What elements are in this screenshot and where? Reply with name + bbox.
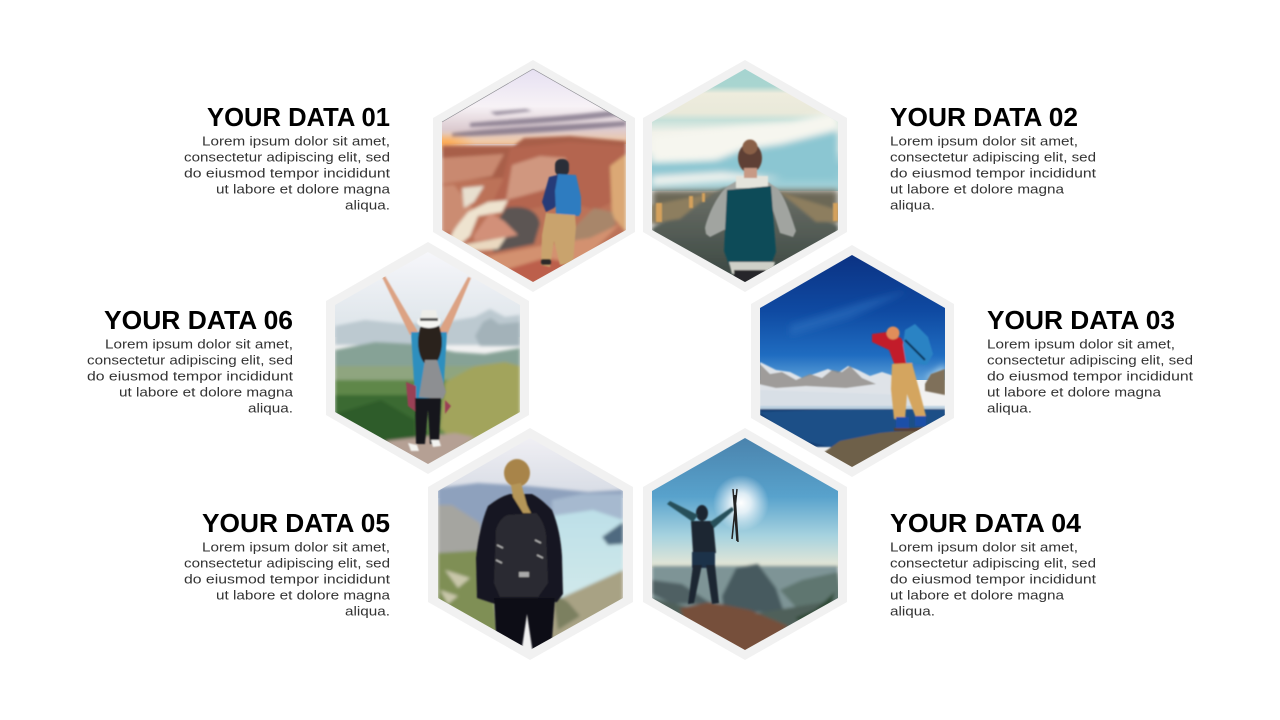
hexagon: photo 04 hiker raising poles (643, 428, 847, 660)
body: your data 02: do eiusmod tempor incididunt (890, 166, 1096, 180)
frame: hexagon 05 (428, 428, 633, 660)
body: your data 01: do eiusmod tempor incididunt (184, 166, 390, 180)
photo: woman in hat above forest (335, 252, 520, 470)
body: your data 05 (184, 540, 391, 618)
photo: hiker on a road (652, 69, 838, 286)
body: your data 05: aliqua. (345, 604, 390, 618)
heading: your data 02: YOUR DATA 02 (890, 104, 1078, 132)
body: your data 06: ut labore et dolore magna (119, 384, 294, 400)
body: your data 03: Lorem ipsum dolor sit amet, (987, 336, 1175, 352)
body: your data 01: aliqua. (345, 198, 390, 212)
hexagon: photo 05 hiker over fjord (428, 428, 633, 660)
hexagon: photo 02 road hiker (643, 60, 847, 292)
icon: road posts (656, 193, 838, 222)
person: hiker in red jacket (872, 324, 933, 431)
body: your data 02: aliqua. (890, 198, 935, 212)
text block: your data 03 (987, 307, 1193, 416)
photo: hiker looking over fjord (438, 438, 623, 654)
body: your data 06: aliqua. (248, 400, 293, 416)
body: your data 01: ut labore et dolore magna (216, 182, 391, 196)
hexagon: photo 06 hiker with raised arms (326, 242, 529, 474)
heading: your data 06: YOUR DATA 06 (104, 307, 293, 335)
text block: your data 06 (87, 307, 294, 416)
person: hiker in black jacket (476, 459, 563, 654)
person: woman with raised arms (382, 276, 471, 451)
icon: sun glow (714, 476, 768, 529)
body: your data 01 (184, 134, 391, 212)
hexagon: photo 01 canyon hiker (416, 60, 635, 292)
person: silhouette with raised arms (667, 501, 734, 604)
heading: your data 03: YOUR DATA 03 (987, 307, 1175, 335)
text block: your data 02 (890, 104, 1096, 212)
body: your data 02: consectetur adipiscing elit, sed (890, 150, 1096, 164)
body: your data 06: Lorem ipsum dolor sit amet, (105, 336, 293, 352)
text block: your data 04 (890, 510, 1096, 618)
body: your data 02 (890, 134, 1096, 212)
body: your data 01: Lorem ipsum dolor sit amet, (202, 134, 390, 148)
body: your data 04: do eiusmod tempor incididunt (890, 572, 1096, 586)
heading: your data 04: YOUR DATA 04 (890, 510, 1082, 538)
body: your data 01: consectetur adipiscing elit, sed (184, 150, 390, 164)
body: your data 03: aliqua. (987, 400, 1032, 416)
body: your data 03: consectetur adipiscing elit, sed (987, 352, 1193, 368)
text block: your data 01 (184, 104, 391, 212)
hexagon: photo 03 photographer at lake (750, 245, 954, 477)
heading: your data 01: YOUR DATA 01 (207, 104, 390, 132)
body: your data 04: consectetur adipiscing elit, sed (890, 556, 1096, 570)
frame: hexagon 02 (643, 60, 847, 292)
body: your data 02: ut labore et dolore magna (890, 182, 1065, 196)
body: your data 04: aliqua. (890, 604, 935, 618)
text block: your data 05 (184, 510, 391, 618)
body: your data 02: Lorem ipsum dolor sit amet, (890, 134, 1078, 148)
person: hiker with blue backpack (541, 159, 581, 267)
photo: hiker overlooking canyon (442, 70, 626, 282)
body: your data 04: Lorem ipsum dolor sit amet, (890, 540, 1078, 554)
person: hiker with teal backpack (705, 140, 796, 284)
body: your data 03 (987, 336, 1193, 416)
body: your data 06: do eiusmod tempor incididunt (87, 368, 293, 384)
heading: your data 05: YOUR DATA 05 (202, 510, 390, 538)
photo: hiker photographing mountain lake (750, 255, 945, 472)
frame: hexagon 01 (433, 60, 635, 292)
body: your data 04: ut labore et dolore magna (890, 588, 1065, 602)
body: your data 03: do eiusmod tempor incididunt (987, 368, 1193, 384)
body: your data 06 (87, 336, 294, 416)
body: your data 03: ut labore et dolore magna (987, 384, 1162, 400)
body: your data 05: ut labore et dolore magna (216, 588, 391, 602)
body: your data 04 (890, 540, 1096, 618)
frame: hexagon 03 (751, 245, 954, 477)
body: your data 05: consectetur adipiscing elit, sed (184, 556, 390, 570)
body: your data 06: consectetur adipiscing elit, sed (87, 352, 293, 368)
artifact: thin dark edge on top of hexagon 01 (442, 69, 626, 122)
frame: hexagon 04 (643, 428, 847, 660)
frame: hexagon 06 (326, 242, 529, 474)
body: your data 05: Lorem ipsum dolor sit amet, (202, 540, 390, 554)
body: your data 05: do eiusmod tempor incididunt (184, 572, 390, 586)
photo: silhouette with trekking poles (652, 438, 842, 656)
icon: trekking poles (732, 489, 738, 542)
